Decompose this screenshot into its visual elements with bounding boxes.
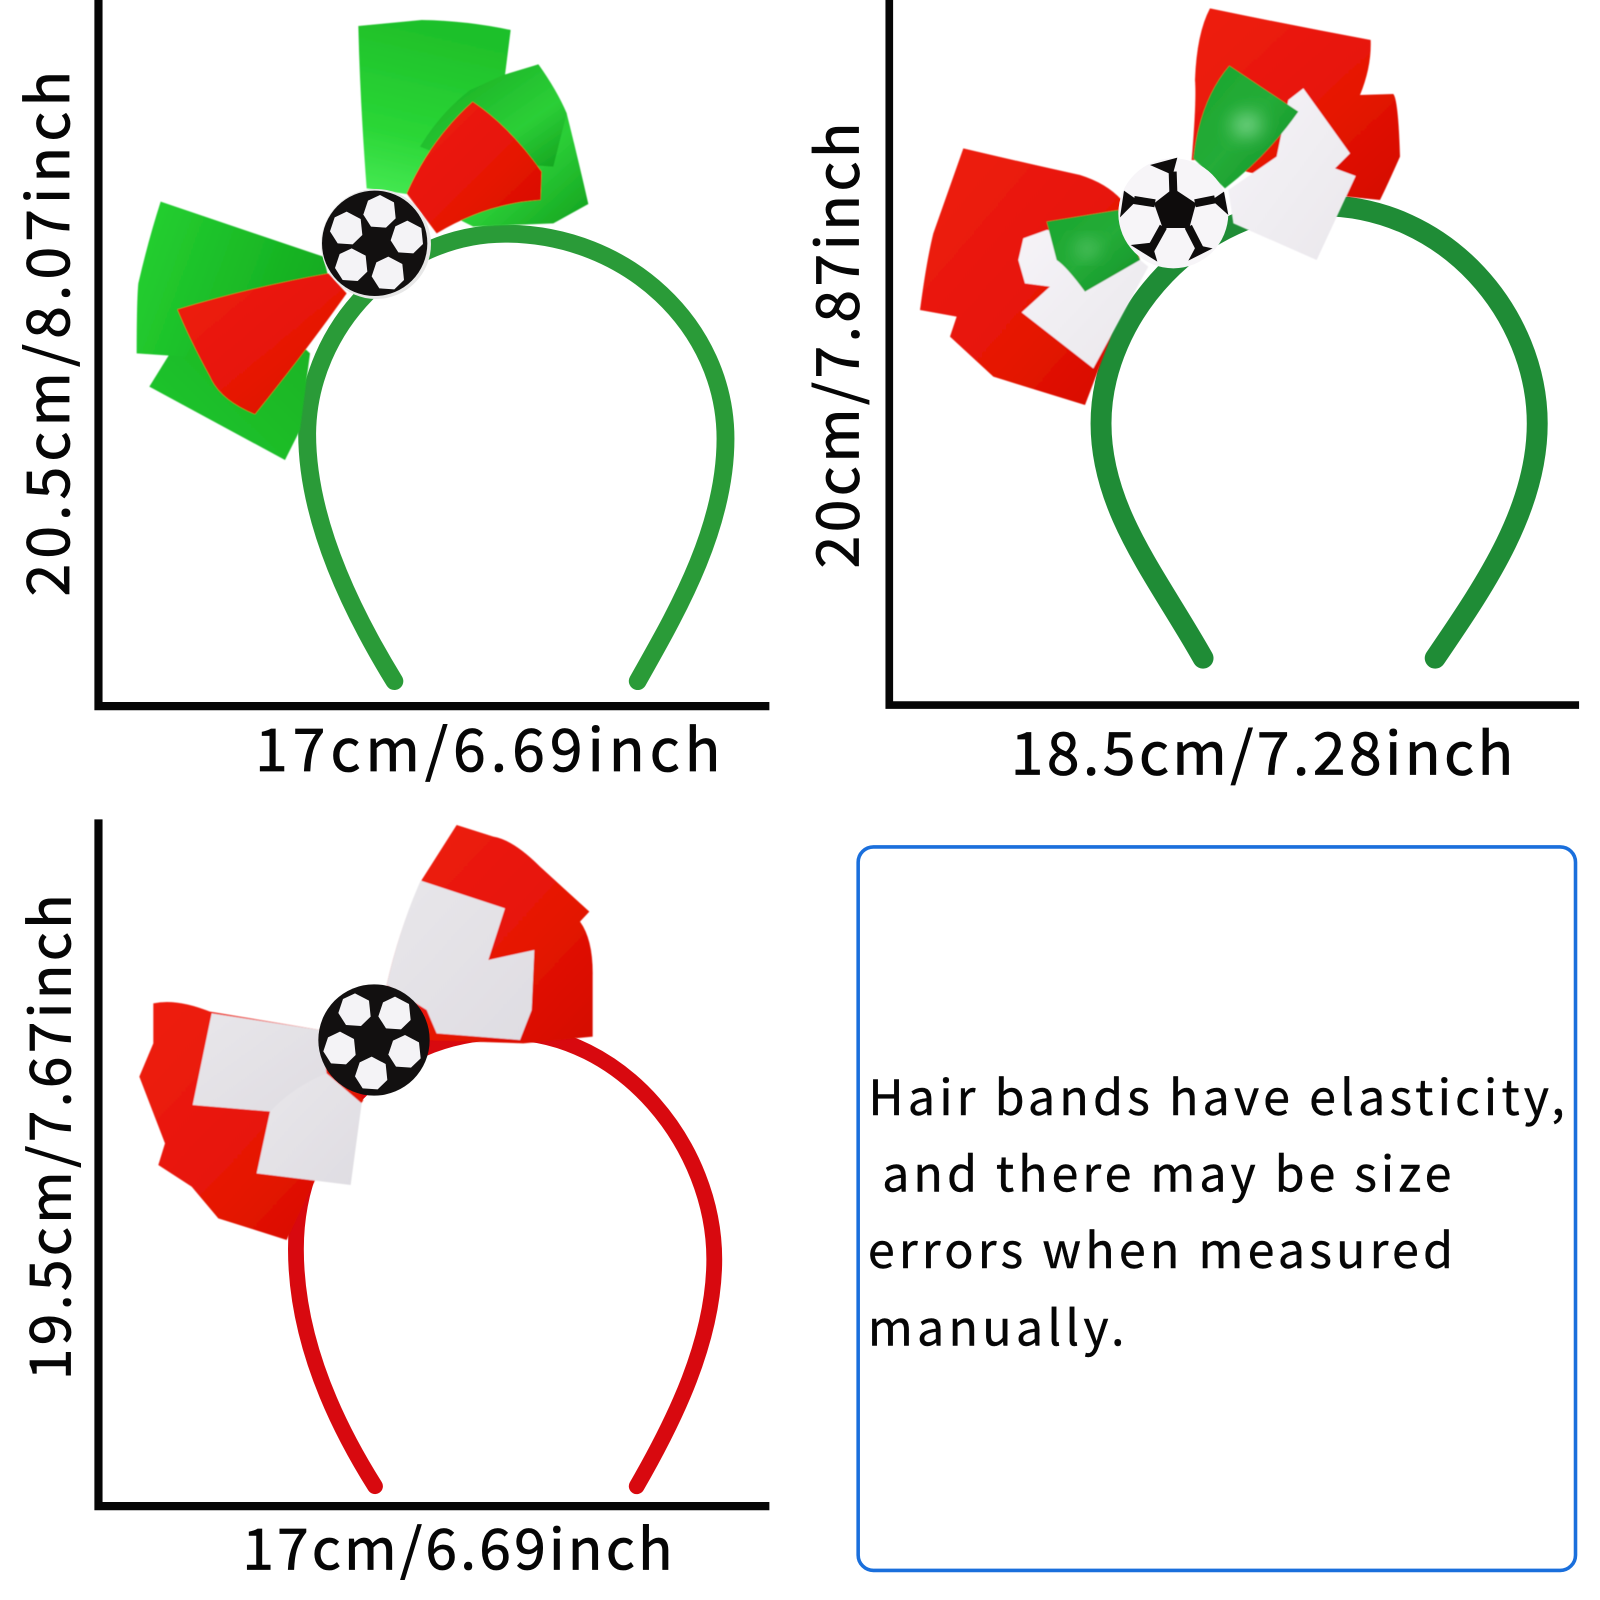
axes: height and width rulers bbox=[889, 0, 1579, 705]
note text: errors when measured bbox=[868, 1212, 1453, 1282]
panel: elasticity note bbox=[858, 847, 1576, 1570]
football badge bbox=[318, 984, 430, 1096]
panel: green bow headband bbox=[1, 0, 769, 788]
bow: red and white ribbon bbox=[139, 825, 593, 1240]
headband: green bbox=[307, 234, 726, 681]
panel: red and white bow headband bbox=[5, 819, 769, 1586]
football badge bbox=[321, 189, 431, 299]
note border bbox=[858, 847, 1576, 1570]
height label: 20.5cm/8.07inch bbox=[1, 71, 86, 596]
note text: manually. bbox=[868, 1289, 1124, 1359]
football badge bbox=[1118, 158, 1228, 268]
note text: Hair bands have elasticity, bbox=[868, 1059, 1565, 1129]
axes: height and width rulers bbox=[98, 819, 769, 1506]
width label: 18.5cm/7.28inch bbox=[1011, 706, 1513, 791]
headband: red bbox=[296, 1032, 714, 1486]
bow: green and red ribbon bbox=[137, 20, 588, 460]
width label: 17cm/6.69inch bbox=[242, 1504, 672, 1586]
axes: height and width rulers bbox=[98, 0, 769, 706]
headband: green bbox=[1101, 206, 1537, 658]
height label: 20cm/7.87inch bbox=[791, 122, 876, 568]
bow: red, white and green ribbon bbox=[920, 8, 1400, 405]
panel: red and green bow headband bbox=[791, 0, 1579, 791]
note text: and there may be size bbox=[882, 1135, 1452, 1205]
width label: 17cm/6.69inch bbox=[255, 703, 720, 788]
note text bbox=[868, 1059, 1565, 1359]
height label: 19.5cm/7.67inch bbox=[5, 894, 87, 1380]
